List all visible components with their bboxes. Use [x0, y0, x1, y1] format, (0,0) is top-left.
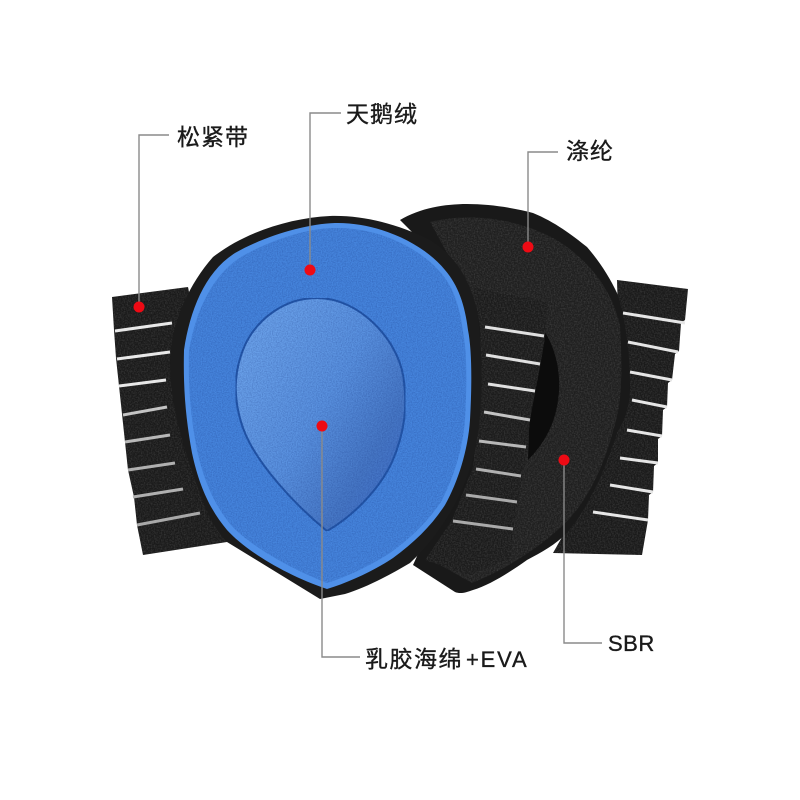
red marker dots: [134, 242, 570, 466]
outer pad face: [189, 228, 466, 583]
right black pad: [400, 204, 630, 593]
blue suede outer pad: [184, 223, 471, 589]
label: elastic band: 松紧带: [177, 124, 249, 150]
label: SBR: SBR: [608, 631, 655, 656]
middle elastic strap: [425, 288, 547, 575]
label: latex foam and EVA: 乳胶海绵: [365, 646, 463, 672]
label: polyester: 涤纶: [566, 138, 614, 164]
left pad black border: [170, 216, 482, 599]
right elastic strap: [553, 280, 688, 555]
label: latex foam and EVA: +EVA: [466, 647, 528, 672]
leader lines: [139, 113, 602, 657]
left elastic strap: [112, 287, 240, 555]
label: suede: 天鹅绒: [346, 101, 418, 127]
blue teardrop inner cushion: [236, 298, 405, 531]
light blue rim: [184, 223, 471, 589]
dark crescent behind strap: [528, 325, 559, 460]
